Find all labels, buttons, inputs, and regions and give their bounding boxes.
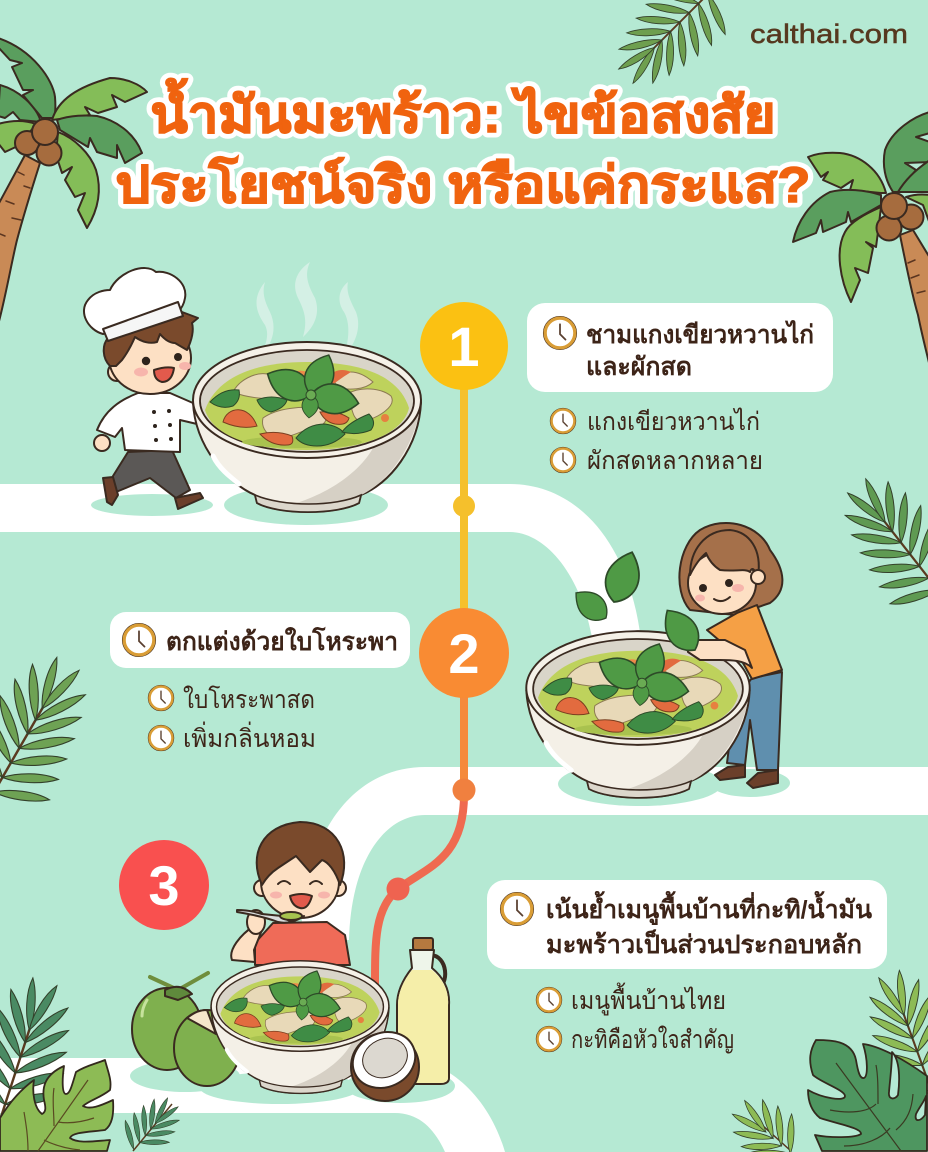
step 2 badge xyxy=(419,608,509,698)
monstera leaf: bottom left xyxy=(0,1060,113,1151)
step 1 list: ผักสดหลากหลาย xyxy=(587,447,763,475)
step 3 list xyxy=(536,982,734,1054)
green coconuts xyxy=(132,973,240,1086)
step 2 list: ใบโหระพาสด xyxy=(183,685,315,714)
girl illustration xyxy=(679,523,782,788)
fern: bottom right xyxy=(846,958,928,1116)
chef illustration xyxy=(84,268,203,509)
fern: right xyxy=(818,456,928,627)
step 3 list: กะทิคือหัวใจสำคัญ xyxy=(571,1025,734,1054)
step 3 badge xyxy=(119,840,209,930)
fern: bottom right lower xyxy=(718,1083,814,1152)
step 3 list: เมนูพื้นบ้านไทย xyxy=(571,982,726,1016)
step 2 list: เพิ่มกลิ่นหอม xyxy=(183,721,316,753)
basil leaves: step 2 xyxy=(568,547,707,658)
step 3 card: เน้นย้ำเมนูพื้นบ้านที่กะทิ/น้ำมัน xyxy=(546,890,872,926)
step 3 badge: 3 xyxy=(148,854,180,917)
step 2 badge: 2 xyxy=(448,622,480,685)
title: น้ำมันมะพร้าว: ไขข้อสงสัย xyxy=(150,78,776,143)
fern: bottom centre xyxy=(112,1085,192,1152)
girl arm and hand xyxy=(686,640,752,668)
monstera leaf: bottom right xyxy=(808,1040,927,1151)
title: ประโยชน์จริง หรือแค่กระแส? xyxy=(116,155,810,213)
half coconut xyxy=(344,1022,424,1101)
palm tree: right xyxy=(793,112,928,367)
bowl: step 2 xyxy=(526,631,750,798)
title xyxy=(116,78,810,213)
step 1 list xyxy=(550,407,763,475)
step 2 card: ตกแต่งด้วยใบโหระพา xyxy=(166,626,398,656)
step 2 list xyxy=(148,685,316,753)
fern: bottom left xyxy=(0,965,95,1147)
ground shadows xyxy=(91,485,790,1104)
fern: left xyxy=(0,636,115,828)
step 1 card: ชามแกงเขียวหวานไก่ xyxy=(586,319,814,349)
fern: top xyxy=(595,0,744,107)
step 1 card xyxy=(527,303,833,392)
title: น้ำมันมะพร้าว: ไขข้อสงสัย xyxy=(150,78,776,143)
palm tree: top left xyxy=(0,38,147,325)
step 1 card: และผักสด xyxy=(586,353,692,381)
step 3 card xyxy=(487,880,887,969)
timeline connector xyxy=(375,380,476,985)
boy illustration xyxy=(231,822,350,965)
step 3 card: มะพร้าวเป็นส่วนประกอบหลัก xyxy=(546,929,862,959)
step 1 badge: 1 xyxy=(448,315,480,378)
bowl: step 3 xyxy=(211,961,389,1093)
step 2 card xyxy=(110,612,410,668)
step 1 badge xyxy=(420,302,508,390)
steam xyxy=(256,262,358,357)
title: ประโยชน์จริง หรือแค่กระแส? xyxy=(116,155,810,213)
step 1 list: แกงเขียวหวานไก่ xyxy=(587,407,760,436)
winding white road xyxy=(0,484,928,1152)
bowl: step 1 xyxy=(193,342,421,512)
site name: calthai.com xyxy=(750,19,908,49)
oil bottle xyxy=(397,938,449,1084)
